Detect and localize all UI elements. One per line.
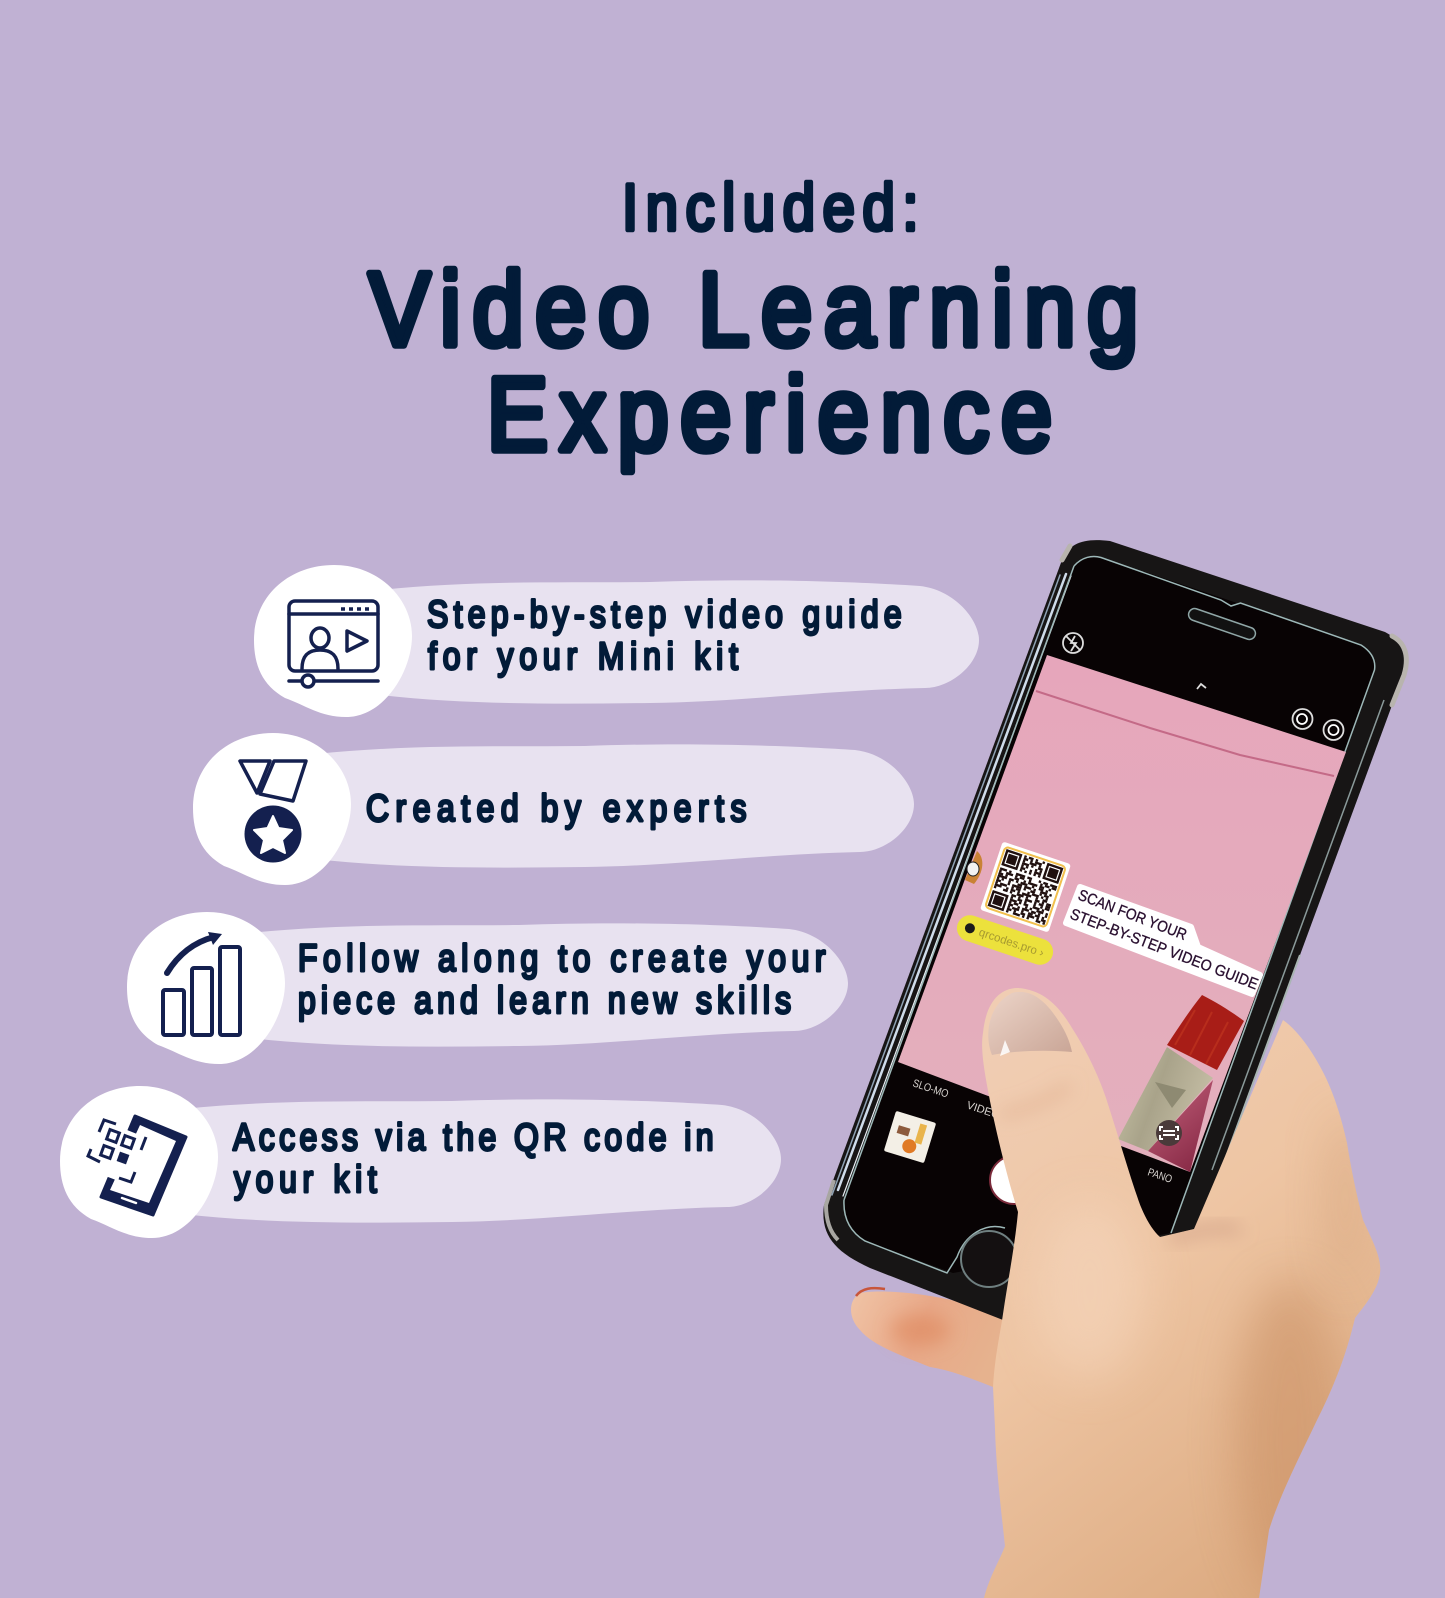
glass outline bbox=[844, 557, 1375, 1273]
feature row 3: follow along bbox=[127, 912, 848, 1064]
heading: video learning: Video Learning bbox=[369, 251, 1138, 367]
focus icon bbox=[1156, 1120, 1182, 1146]
experts text: Created by experts bbox=[366, 787, 747, 830]
heading: experience: Experience bbox=[487, 356, 1052, 472]
follow text: Follow along to create your bbox=[298, 937, 826, 980]
feature row 2: experts bbox=[193, 733, 914, 885]
icon: growth chart bbox=[163, 932, 240, 1035]
camera mode labels bbox=[911, 1077, 1174, 1186]
qr text: your kit bbox=[234, 1158, 377, 1201]
right edge highlight bbox=[1212, 700, 1384, 1170]
follow text: piece and learn new skills bbox=[298, 979, 791, 1022]
white blob bbox=[127, 912, 285, 1064]
icon: medal bbox=[240, 761, 306, 862]
metallic edge stripes bbox=[832, 574, 1071, 1196]
pill background bbox=[380, 580, 979, 704]
shutter button bbox=[990, 1156, 1038, 1204]
screen bbox=[844, 557, 1374, 1273]
title block bbox=[369, 172, 1138, 472]
gallery thumbnail bbox=[884, 1111, 936, 1163]
home button bbox=[961, 1231, 1017, 1287]
pill background bbox=[182, 1099, 781, 1223]
qr link pill bbox=[953, 912, 1057, 968]
skin shading bbox=[1000, 1085, 1365, 1598]
white blob bbox=[254, 565, 412, 717]
phone illustration bbox=[823, 540, 1406, 1320]
hand bbox=[982, 988, 1380, 1598]
speaker bbox=[1187, 607, 1257, 641]
white blob bbox=[60, 1086, 218, 1238]
feature row 4: qr code bbox=[60, 1086, 781, 1238]
phone case bbox=[823, 540, 1406, 1320]
fabric crease bbox=[1036, 691, 1334, 776]
icon: tablet qr bbox=[88, 1116, 186, 1215]
camera mode labels: VIDEO bbox=[965, 1099, 1002, 1122]
step text: for your Mini kit bbox=[428, 635, 738, 678]
index finger behind phone bbox=[851, 1288, 1010, 1392]
hand shape bbox=[982, 988, 1380, 1598]
camera mode labels: SLO-MO bbox=[911, 1077, 950, 1101]
camera view: pink fabric bbox=[898, 655, 1346, 1172]
qr text: Access via the QR code in bbox=[233, 1116, 713, 1159]
qr link pill: qrcodes.pro › bbox=[977, 927, 1045, 960]
step text bbox=[427, 593, 902, 678]
pill background bbox=[315, 744, 914, 868]
camera icons bbox=[1063, 633, 1344, 740]
white blob bbox=[193, 733, 351, 885]
follow text bbox=[298, 937, 826, 1022]
thumbnail nail bbox=[988, 992, 1072, 1055]
pill background bbox=[249, 923, 848, 1047]
heading: included: Included: bbox=[622, 172, 919, 245]
scan sticker: SCAN FOR YOUR bbox=[1076, 887, 1189, 944]
icon: video player bbox=[289, 601, 378, 687]
feature row 1: video guide bbox=[254, 565, 979, 717]
paint brush bbox=[1118, 995, 1244, 1172]
qr code sticker bbox=[980, 841, 1071, 933]
qr text bbox=[233, 1116, 713, 1201]
cartoon sticker edge bbox=[965, 851, 982, 884]
camera mode labels: PANO bbox=[1146, 1166, 1174, 1186]
scan sticker: STEP-BY-STEP VIDEO GUIDE bbox=[1068, 906, 1260, 993]
step text: Step-by-step video guide bbox=[427, 593, 902, 636]
